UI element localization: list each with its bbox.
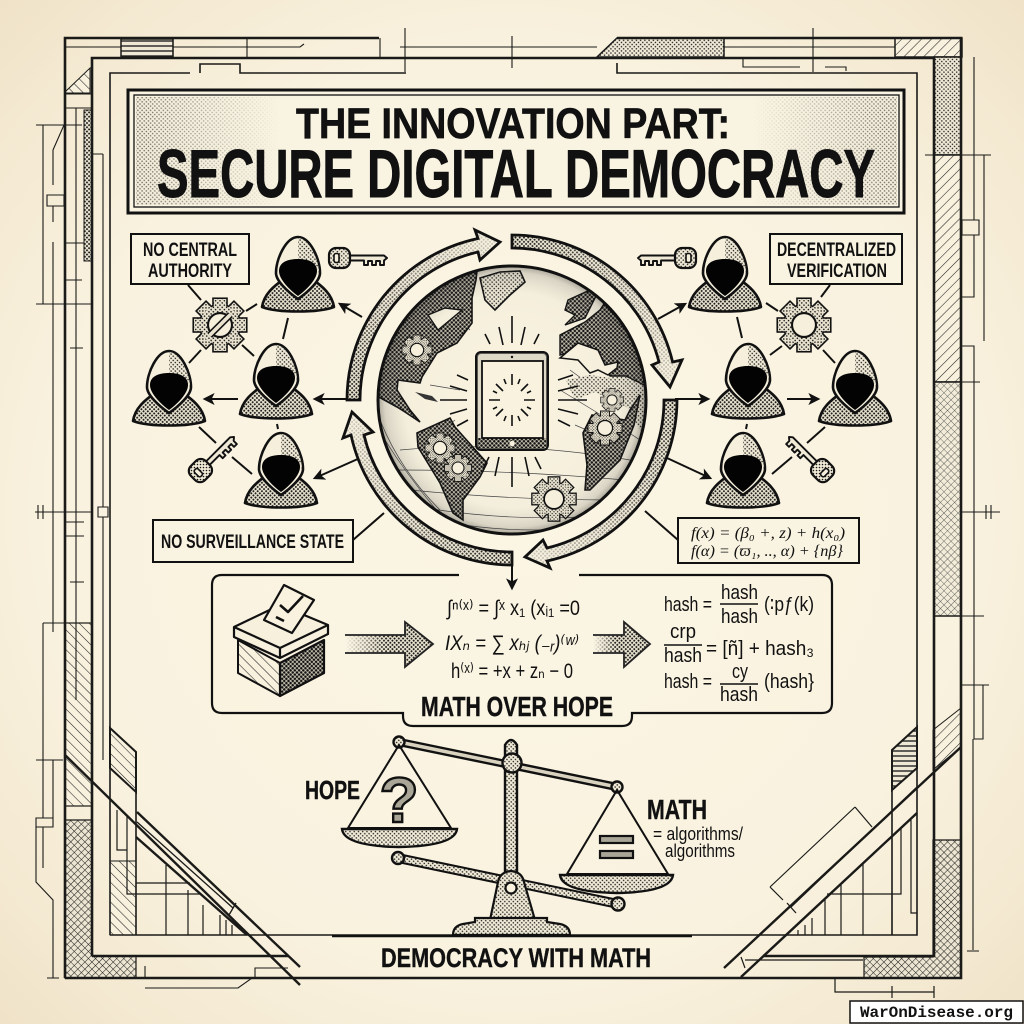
scale: right triangle (567, 790, 668, 874)
icon: question mark: ? (379, 764, 419, 836)
label: no central authority: NO CENTRAL (143, 239, 237, 261)
globe: Mediterranean land (560, 343, 618, 375)
globe: rays (440, 316, 587, 487)
frame: bottom-right brackets (741, 807, 934, 998)
scale: upper beam (399, 739, 617, 790)
frame: left strip details (65, 94, 92, 700)
arrow: bottom-left (343, 412, 512, 565)
label: no central authority (131, 234, 249, 284)
frame: diagonal bottom-right (724, 747, 961, 977)
title line one: THE INNOVATION PART: (296, 100, 730, 148)
frame: top slanted block (597, 38, 724, 57)
arrow: top-right (512, 235, 682, 387)
formulas: column two: = [ñ] + hash₃ (706, 638, 814, 660)
globe: Canada lake (428, 308, 462, 330)
globe: North America (375, 262, 478, 422)
formulas: column two: cy (732, 661, 748, 683)
globe: fine ocean lines (380, 310, 642, 530)
cycle arrows around globe (343, 230, 682, 568)
frame: top-left stripes (121, 39, 173, 57)
icon: key top-left (329, 248, 387, 268)
label: no central authority: AUTHORITY (148, 260, 232, 282)
arrow: into panel (511, 562, 513, 588)
label: formula box: f(x) = (β₀ +, z) + h(x₀) (691, 525, 845, 542)
frame: dimension lines left (35, 125, 288, 988)
label: math: MATH (647, 794, 707, 825)
formulas: column two: hash (664, 645, 702, 667)
frame: right dotted strip (934, 57, 961, 155)
icon: key bottom-left (186, 430, 241, 485)
frame: diagonal bottom-left (65, 755, 300, 985)
globe: Central America island (415, 392, 438, 402)
frame: diagonal thin left (137, 822, 236, 915)
formulas: column one (445, 597, 580, 683)
formulas: column two (664, 582, 814, 706)
label: no surveillance state (153, 520, 353, 562)
formulas: column two: hash (720, 684, 758, 706)
frame: inner bold lines (92, 58, 934, 956)
label: decentralized verification: DECENTRALIZED (777, 239, 896, 261)
label: no surveillance state: NO SURVEILLANCE STATE (161, 531, 344, 553)
frame: bottom-left lower inner hatch (110, 861, 136, 935)
frame: bottom-right hatch (933, 708, 961, 770)
formulas: column one: h⁽ˣ⁾ = +x + zₙ − 0 (451, 660, 573, 683)
globe (375, 262, 660, 534)
balance scale (305, 736, 743, 936)
formulas: column one: IXₙ = ∑ xₕⱼ (₋ᵣ)⁽ʷ⁾ (445, 632, 579, 655)
formulas: column two: hash = (664, 594, 712, 616)
label: formula box: f(α) = (ϖ₁, .., α) + {nβ} (691, 543, 844, 560)
arrow: top-left (347, 230, 500, 400)
watermark: WarOnDisease.org (860, 1004, 1013, 1022)
icon: tablet (476, 352, 548, 450)
label: decentralized verification (770, 234, 902, 284)
frame: right light cross hatch (934, 382, 961, 616)
frame: left dotted strip (84, 110, 92, 261)
globe: Africa (583, 395, 640, 490)
scale: post (505, 740, 517, 880)
icon: left gear with slash (194, 299, 246, 351)
scale: left triangle (348, 745, 451, 828)
frame: left lower hatch (65, 623, 92, 806)
arrow: bottom-right (525, 400, 677, 568)
formulas: column two: crp (670, 621, 696, 643)
scale: right pan (560, 875, 673, 893)
icon: right gear (778, 299, 830, 351)
frame: bottom-left cross hatch (65, 820, 136, 978)
icon: key bottom-right (782, 430, 837, 485)
formulas: column two: (hash} (764, 671, 814, 693)
frame: left top hatch (65, 68, 90, 93)
footer caption: DEMOCRACY WITH MATH (381, 943, 651, 973)
globe: Europe (565, 290, 596, 325)
title banner (128, 90, 904, 213)
frame: dimension lines right (925, 57, 1000, 951)
formulas: column two: hash (721, 582, 758, 604)
scale: lower beam (398, 854, 618, 908)
globe: South America (417, 418, 487, 520)
network connector lines (188, 285, 835, 540)
frame: bottom-left grid (117, 810, 232, 935)
scale: foot (453, 871, 570, 935)
frame: bottom-right inner hatch (892, 727, 917, 790)
formulas: column one: ∫ⁿ⁽ˣ⁾ = ∫ˣ x₁ (xᵢ₁ =0 (446, 597, 580, 620)
label: formula box (678, 518, 859, 563)
icon: key top-right (638, 248, 696, 268)
globe: gears (402, 336, 623, 520)
arrow: ballot to formulas (345, 622, 433, 667)
label: algorithms: = algorithms/ (653, 824, 743, 844)
formulas: column two: hash (721, 606, 758, 628)
label: decentralized verification: VERIFICATION (787, 260, 887, 282)
frame: bottom-right cross hatch (864, 840, 961, 978)
panel: math over hope (212, 562, 832, 726)
icon: equals sign (600, 836, 633, 858)
formulas: column two: hash = (664, 671, 712, 693)
right hooded voters (689, 237, 891, 508)
icon: ballot box (234, 585, 328, 696)
label: algorithms (653, 824, 743, 861)
frame: bottom-left inner hatch (110, 728, 136, 792)
panel heading: MATH OVER HOPE (421, 691, 613, 722)
frame: right hatch strip (934, 155, 961, 382)
globe: Eurasia (559, 304, 644, 386)
scale: pivots (392, 736, 624, 910)
frame: diagonal thin right (787, 787, 917, 913)
arrow: formulas to hashes (593, 622, 650, 667)
label: hope: HOPE (305, 775, 360, 805)
frame: top-right hatch (895, 38, 962, 57)
scale: left pan (342, 829, 457, 847)
label: algorithms: algorithms (665, 841, 735, 861)
globe: Greenland (480, 271, 525, 310)
scale: ground line (332, 935, 692, 937)
left hooded voters (133, 237, 334, 508)
frame: thin inner lines (110, 63, 917, 935)
globe: mid-tone Asia shading (566, 375, 644, 430)
frame: top details (65, 28, 895, 72)
formulas: column two: (∶pƒ(k) (764, 594, 814, 616)
